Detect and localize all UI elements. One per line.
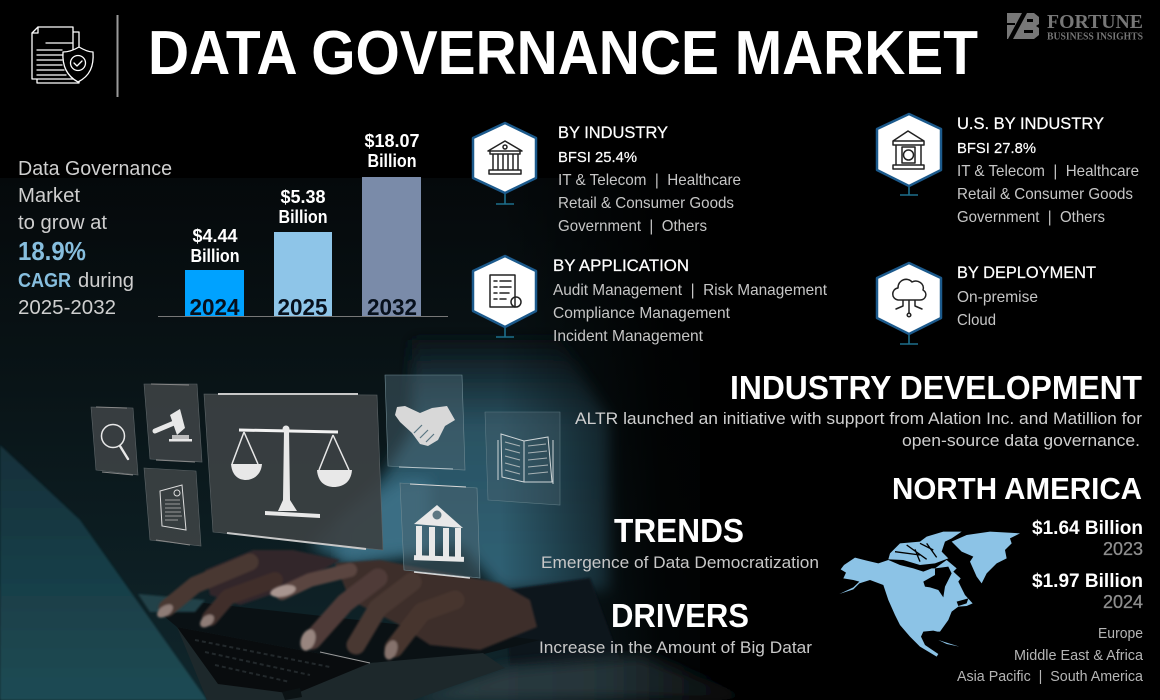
stats: North America market size: $1.97 Billion bbox=[1032, 571, 1143, 592]
text block: by deployment: BY DEPLOYMENT bbox=[957, 263, 1096, 282]
text block: other regions: Europe bbox=[1098, 625, 1143, 642]
text block: CAGR: CAGR bbox=[18, 270, 71, 292]
icon: bank hexagon bbox=[473, 123, 536, 204]
heading: trends: TRENDS bbox=[614, 512, 744, 549]
text block: by industry: BY INDUSTRY bbox=[558, 123, 668, 142]
text block: U.S. by industry: Retail & Consumer Goods bbox=[957, 186, 1133, 203]
text block: by deployment: On-premise bbox=[957, 289, 1038, 306]
text block: by application: Compliance Management bbox=[553, 305, 731, 322]
text block: CAGR: 2025-2032 bbox=[18, 297, 116, 319]
stats: North America market size: 2024 bbox=[1103, 592, 1143, 612]
text block: industry development detail: open-source data governance. bbox=[902, 431, 1140, 450]
stats: North America market size: 2023 bbox=[1103, 539, 1143, 559]
icon panel: courthouse bbox=[400, 483, 480, 578]
text block: CAGR: 18.9% bbox=[18, 236, 86, 266]
icon panel: open book bbox=[485, 412, 560, 505]
stats: North America market size bbox=[1032, 518, 1143, 612]
text block: other regions: Middle East & Africa bbox=[1014, 647, 1144, 664]
text block: by industry: Retail & Consumer Goods bbox=[558, 195, 734, 212]
text block: CAGR: Market bbox=[18, 185, 80, 207]
bar: 2024: 2024 bbox=[190, 294, 240, 320]
bar: 2025: Billion bbox=[278, 207, 328, 227]
text block: U.S. by industry: IT & Telecom | Healthcare bbox=[957, 163, 1139, 180]
text block: by industry: Government | Others bbox=[558, 218, 707, 235]
text block: U.S. by industry: BFSI 27.8% bbox=[957, 140, 1036, 157]
text block: U.S. by industry: U.S. BY INDUSTRY bbox=[957, 114, 1104, 133]
hand: right bbox=[269, 560, 537, 661]
text block: industry development detail: ALTR launched an initiative with support from Alation Inc. and Matillion for bbox=[575, 409, 1142, 428]
text block: CAGR: Data Governance bbox=[18, 158, 172, 180]
text: trends detail: Emergence of Data Democratization bbox=[541, 553, 819, 572]
text block: U.S. by industry: Government | Others bbox=[957, 209, 1105, 226]
bar chart bbox=[158, 131, 448, 320]
bar: 2024 bbox=[185, 226, 244, 320]
text block: by industry: IT & Telecom | Healthcare bbox=[558, 172, 741, 189]
icon panel: certificate document bbox=[144, 468, 201, 546]
bar: 2032: $18.07 bbox=[364, 131, 420, 151]
text block: by deployment bbox=[957, 263, 1096, 329]
text block: by industry: BFSI 25.4% bbox=[558, 149, 637, 166]
text block: U.S. by industry bbox=[957, 114, 1139, 226]
text block: other regions: Asia Pacific | South America bbox=[957, 668, 1144, 685]
bar: 2025 bbox=[274, 187, 332, 320]
logo: Fortune Business Insights: BUSINESS INSIGHTS bbox=[1047, 32, 1143, 42]
heading: drivers: DRIVERS bbox=[611, 597, 749, 634]
logo: Fortune Business Insights: FORTUNE bbox=[1047, 11, 1143, 33]
icon panel: scales of justice bbox=[204, 394, 383, 550]
bar: 2024: Billion bbox=[190, 246, 240, 266]
icon: cloud network hexagon bbox=[877, 263, 941, 344]
bar: 2025: 2025 bbox=[278, 294, 328, 320]
title: DATA GOVERNANCE MARKET bbox=[148, 19, 978, 88]
icon panel: handshake bbox=[385, 375, 465, 470]
bar: 2025: $5.38 bbox=[280, 187, 326, 207]
bar: 2032: Billion bbox=[368, 151, 416, 171]
map: North America bbox=[839, 532, 1020, 657]
icon: checklist hexagon bbox=[473, 256, 536, 337]
logo: Fortune Business Insights bbox=[1007, 11, 1143, 42]
icon panel: magnifier bbox=[91, 407, 138, 475]
text block: by application: Audit Management | Risk Management bbox=[553, 282, 828, 299]
icon: bank with dollar hexagon bbox=[877, 114, 941, 195]
bar: 2032: 2032 bbox=[367, 294, 417, 320]
header divider bbox=[116, 15, 118, 97]
text block: by deployment: Cloud bbox=[957, 312, 996, 329]
icon: document with shield bbox=[32, 27, 93, 83]
text block: CAGR bbox=[18, 158, 172, 319]
text: drivers detail: Increase in the Amount of Big Datar bbox=[539, 638, 812, 657]
text block: by application: BY APPLICATION bbox=[553, 256, 689, 275]
text block: CAGR: to grow at bbox=[18, 212, 107, 234]
text block: by industry bbox=[558, 123, 741, 235]
heading: industry development: INDUSTRY DEVELOPMENT bbox=[730, 369, 1142, 406]
icon panel: gavel bbox=[144, 384, 202, 462]
text block: industry development detail bbox=[575, 409, 1142, 450]
text block: other regions bbox=[957, 625, 1144, 685]
bar: 2032 bbox=[362, 131, 421, 320]
hand: left bbox=[155, 550, 340, 630]
text block: by application: Incident Management bbox=[553, 328, 704, 345]
stats: North America market size: $1.64 Billion bbox=[1032, 518, 1143, 539]
text block: by application bbox=[553, 256, 828, 345]
heading: North America: NORTH AMERICA bbox=[892, 471, 1142, 506]
background photo: hands on laptop with floating legal icons bbox=[0, 178, 820, 700]
text block: CAGR: during bbox=[78, 270, 134, 292]
bar: 2024: $4.44 bbox=[192, 226, 238, 246]
